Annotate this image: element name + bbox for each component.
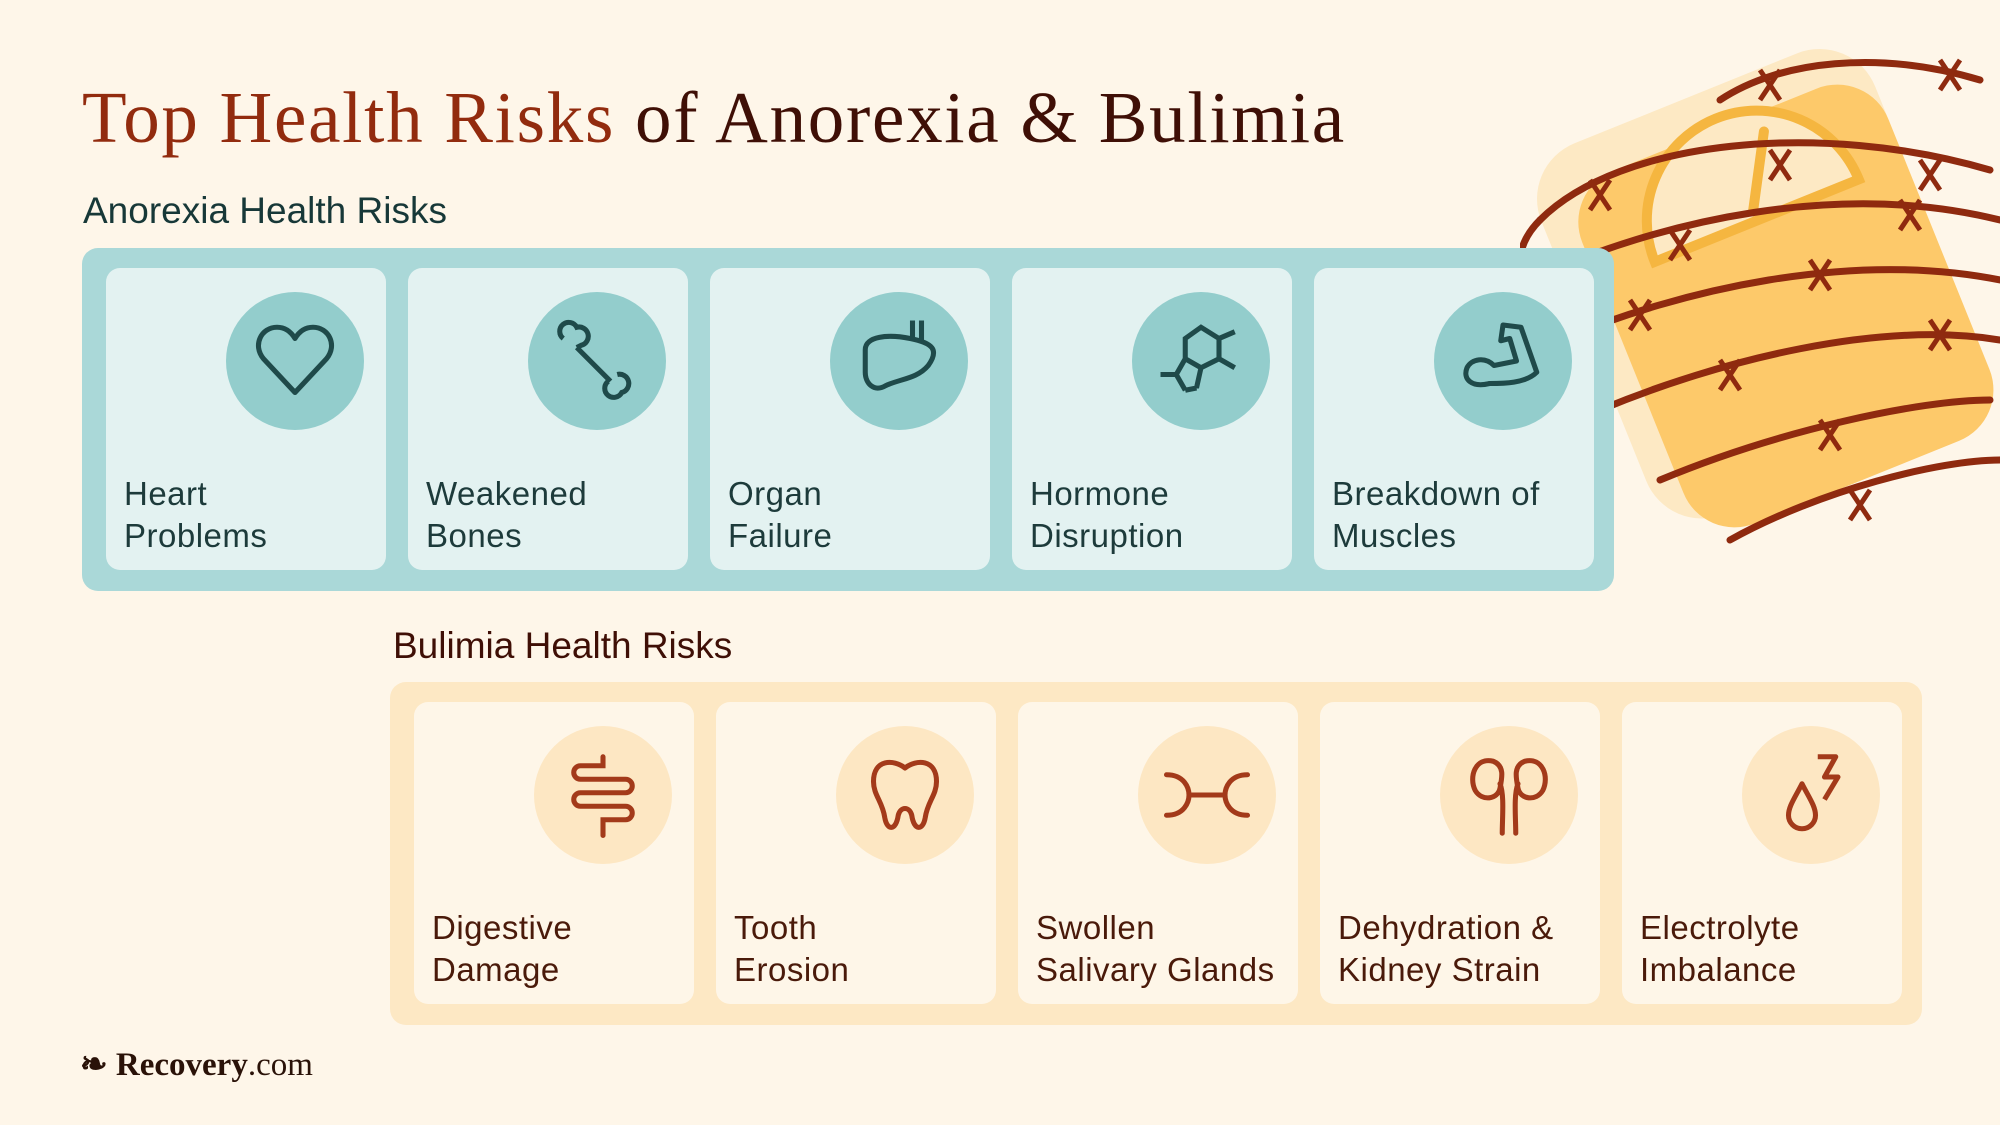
card: tooth erosion xyxy=(716,702,996,1004)
card: digestive damage xyxy=(414,702,694,1004)
card: swollen salivary glands xyxy=(1018,702,1298,1004)
card: tooth erosion: Erosion xyxy=(734,951,849,988)
card: hormone disruption: Hormone xyxy=(1030,475,1169,512)
card: swollen salivary glands: Swollen xyxy=(1036,909,1155,946)
heading: anorexia: Anorexia Health Risks xyxy=(83,190,447,231)
card: electrolyte imbalance: Imbalance xyxy=(1640,951,1797,988)
card: digestive damage: Digestive xyxy=(432,909,572,946)
card: breakdown of muscles xyxy=(1314,268,1594,570)
card: dehydration & kidney strain xyxy=(1320,702,1600,1004)
heading: bulimia: Bulimia Health Risks xyxy=(393,625,732,666)
card: hormone disruption: Disruption xyxy=(1030,517,1184,554)
card: swollen salivary glands: Salivary Glands xyxy=(1036,951,1275,988)
card: organ failure xyxy=(710,268,990,570)
card: tooth erosion: Tooth xyxy=(734,909,817,946)
card: heart problems: Heart xyxy=(124,475,207,512)
card: electrolyte imbalance: Electrolyte xyxy=(1640,909,1800,946)
card: electrolyte imbalance xyxy=(1622,702,1902,1004)
panel: anorexia xyxy=(82,248,1614,591)
illustration: scale with barbed wire xyxy=(1520,49,2000,544)
card: weakened bones xyxy=(408,268,688,570)
card: breakdown of muscles: Muscles xyxy=(1332,517,1457,554)
panel: bulimia xyxy=(390,682,1922,1025)
logo: ❧ Recovery.com xyxy=(80,1047,313,1083)
card: weakened bones: Bones xyxy=(426,517,522,554)
card: organ failure: Failure xyxy=(728,517,832,554)
card: weakened bones: Weakened xyxy=(426,475,587,512)
card: heart problems: Problems xyxy=(124,517,267,554)
card: organ failure: Organ xyxy=(728,475,822,512)
card: digestive damage: Damage xyxy=(432,951,560,988)
title: Top Health Risks of Anorexia & Bulimia xyxy=(82,77,1346,158)
card: dehydration & kidney strain: Kidney Strain xyxy=(1338,951,1541,988)
card: breakdown of muscles: Breakdown of xyxy=(1332,475,1540,512)
card: dehydration & kidney strain: Dehydration & xyxy=(1338,909,1554,946)
card: heart problems xyxy=(106,268,386,570)
card: hormone disruption xyxy=(1012,268,1292,570)
